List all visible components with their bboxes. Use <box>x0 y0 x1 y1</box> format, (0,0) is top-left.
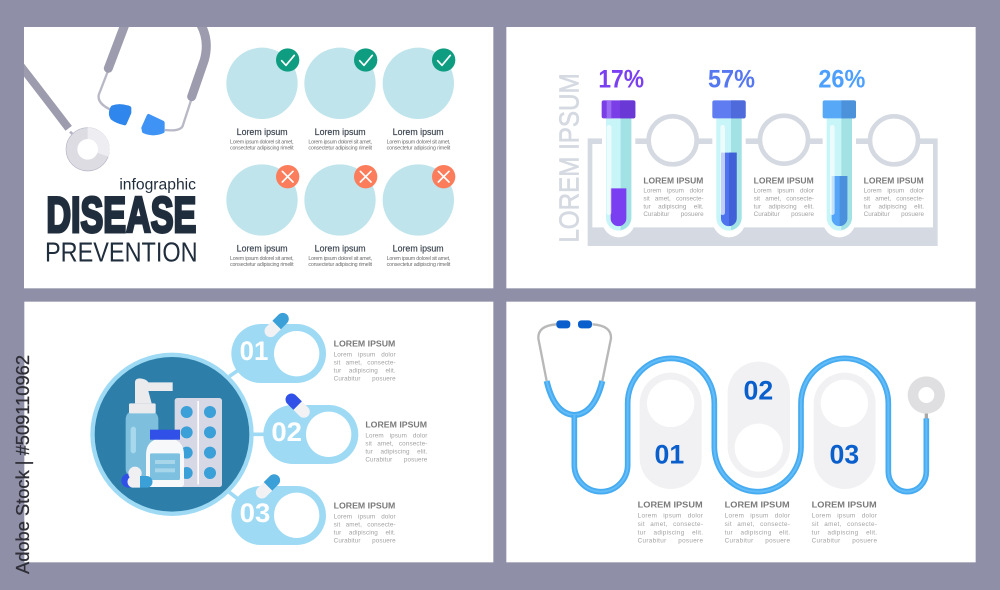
text block 02: LOREM IPSUM <box>725 499 790 509</box>
item: don't 1 <box>226 164 299 268</box>
step pill 03 <box>814 373 876 489</box>
item: don't 2: consectetur adipiscing rimelit <box>308 262 373 268</box>
frame <box>588 138 938 246</box>
item 03 <box>231 472 396 545</box>
text block 1: tur adipiscing elit. <box>643 203 704 210</box>
item 02: sit amet, consecte- <box>365 440 427 447</box>
text block 01: LOREM IPSUM <box>638 499 703 509</box>
item 01: LOREM IPSUM <box>334 339 395 349</box>
text block 3: Curabitur posuere <box>864 211 924 218</box>
icon: pill jar <box>146 430 184 487</box>
tube group 1: 17% <box>598 66 644 237</box>
medicine circle <box>90 353 254 516</box>
text block 02 <box>725 499 790 545</box>
item 02: Curabitur posuere <box>365 456 428 463</box>
item: do 1: consectetur adipiscing rimelit <box>230 145 294 151</box>
item 02: Lorem ipsum dolor <box>365 432 427 439</box>
item 02: 02 <box>271 417 302 447</box>
text block 03: tur adipiscing elit. <box>812 529 877 536</box>
tube group 3: 26% <box>818 66 865 237</box>
icon: capsule <box>253 472 283 501</box>
text block 01: sit amet, consecte- <box>638 521 703 528</box>
item: don't 1: consectetur adipiscing rimelit <box>230 262 294 268</box>
item: don't 1: Lorem ipsum <box>237 244 288 254</box>
item: don't 2: Lorem ipsum dolorel sit amet, <box>308 256 372 262</box>
item 03: 03 <box>240 498 270 528</box>
step pill 02: 02 <box>744 376 773 406</box>
item: do 3 <box>383 48 455 151</box>
text block 03: Lorem ipsum dolor <box>812 513 877 520</box>
panel: disease prevention title and checklist <box>20 18 493 288</box>
connector lines <box>229 370 265 499</box>
text block 3: sit amet, consecte- <box>864 195 924 202</box>
text block 3: LOREM IPSUM <box>864 175 924 185</box>
text block 03: Curabitur posuere <box>812 538 877 545</box>
text block 3: Lorem ipsum dolor <box>864 188 924 195</box>
text block 02: Lorem ipsum dolor <box>725 513 790 520</box>
item 01: Lorem ipsum dolor <box>334 351 396 358</box>
item 03: Curabitur posuere <box>334 537 396 544</box>
item 01: 01 <box>240 336 268 366</box>
text block 2: Curabitur posuere <box>754 211 814 218</box>
item: do 3: Lorem ipsum dolorel sit amet, <box>387 139 450 145</box>
text block 2: sit amet, consecte- <box>754 195 814 202</box>
item 03: sit amet, consecte- <box>334 521 396 528</box>
text block 01 <box>638 499 703 545</box>
panel: test tube percentages <box>506 27 976 288</box>
item: don't 2 <box>304 164 377 268</box>
item 01 <box>231 310 396 383</box>
icon: capsule <box>262 310 291 340</box>
item 03: LOREM IPSUM <box>334 500 395 510</box>
text block 1 <box>643 175 704 218</box>
text block 2: LOREM IPSUM <box>754 175 814 185</box>
text block 3: tur adipiscing elit. <box>864 203 924 210</box>
text block 1: sit amet, consecte- <box>643 195 704 202</box>
text block 01: tur adipiscing elit. <box>638 529 703 536</box>
icon: stethoscope tube <box>538 320 945 492</box>
ring 3 <box>870 116 918 164</box>
heading: disease: DISEASE <box>46 187 196 243</box>
item: do 1 <box>226 48 299 151</box>
item: do 1: Lorem ipsum <box>237 127 288 137</box>
text block 02: sit amet, consecte- <box>725 521 790 528</box>
step pill 02 <box>728 362 790 478</box>
item: don't 1: Lorem ipsum dolorel sit amet, <box>230 256 294 262</box>
text block 3 <box>864 175 924 218</box>
item: do 3: Lorem ipsum <box>393 127 444 137</box>
heading: prevention: PREVENTION <box>45 237 198 268</box>
text block 01: Lorem ipsum dolor <box>638 513 703 520</box>
text block 2: Lorem ipsum dolor <box>754 188 814 195</box>
icon: capsule <box>283 391 312 420</box>
tube group 1: 17%: 17% <box>598 66 644 94</box>
heading: infographic: infographic <box>119 176 196 193</box>
item: do 3: consectetur adipiscing rimelit <box>387 145 451 151</box>
item 02: tur adipiscing elit. <box>365 448 428 455</box>
item: don't 3: Lorem ipsum dolorel sit amet, <box>387 256 450 262</box>
tube group 2: 57% <box>708 66 755 237</box>
stock credit: Adobe Stock | #509110962 <box>13 355 33 574</box>
item: don't 2: Lorem ipsum <box>315 244 366 254</box>
step pill 03: 03 <box>830 440 859 470</box>
item: do 1: Lorem ipsum dolorel sit amet, <box>230 139 294 145</box>
vertical heading: LOREM IPSUM <box>553 73 584 243</box>
item: do 2: Lorem ipsum <box>315 127 366 137</box>
item 01: Curabitur posuere <box>334 375 396 382</box>
item: do 2 <box>304 48 377 151</box>
item 02 <box>263 391 428 464</box>
ring 2 <box>760 116 808 164</box>
item 01: sit amet, consecte- <box>334 359 396 366</box>
item 03: Lorem ipsum dolor <box>334 513 396 520</box>
icon: spray bottle <box>126 378 173 478</box>
text block 03 <box>812 499 877 545</box>
item: don't 3: Lorem ipsum <box>393 244 444 254</box>
text block 02: tur adipiscing elit. <box>725 529 790 536</box>
item: don't 3 <box>383 164 455 268</box>
text block 1: Curabitur posuere <box>643 211 704 218</box>
icon: stethoscope <box>20 18 206 171</box>
text block 01: Curabitur posuere <box>638 538 703 545</box>
item 02: LOREM IPSUM <box>365 420 427 430</box>
icon: blister pack <box>175 398 222 487</box>
step pill 01 <box>640 373 702 489</box>
item 03: tur adipiscing elit. <box>334 529 396 536</box>
item: do 2: consectetur adipiscing rimelit <box>308 145 373 151</box>
text block 03: sit amet, consecte- <box>812 521 877 528</box>
tube group 2: 57%: 57% <box>708 66 755 94</box>
ring 1 <box>649 116 697 164</box>
text block 2 <box>754 175 814 218</box>
panel: medication options <box>24 302 493 562</box>
text block 1: Lorem ipsum dolor <box>643 188 704 195</box>
item: don't 3: consectetur adipiscing rimelit <box>387 262 451 268</box>
tube group 3: 26%: 26% <box>818 66 865 94</box>
item 01: tur adipiscing elit. <box>334 367 396 374</box>
text block 2: tur adipiscing elit. <box>754 203 814 210</box>
text block 02: Curabitur posuere <box>725 538 790 545</box>
icon: loose capsules <box>121 467 152 488</box>
panel: stethoscope timeline <box>506 302 976 562</box>
step pill 01: 01 <box>655 440 684 470</box>
item: do 2: Lorem ipsum dolorel sit amet, <box>308 139 372 145</box>
text block 1: LOREM IPSUM <box>643 175 703 185</box>
text block 03: LOREM IPSUM <box>812 499 877 509</box>
